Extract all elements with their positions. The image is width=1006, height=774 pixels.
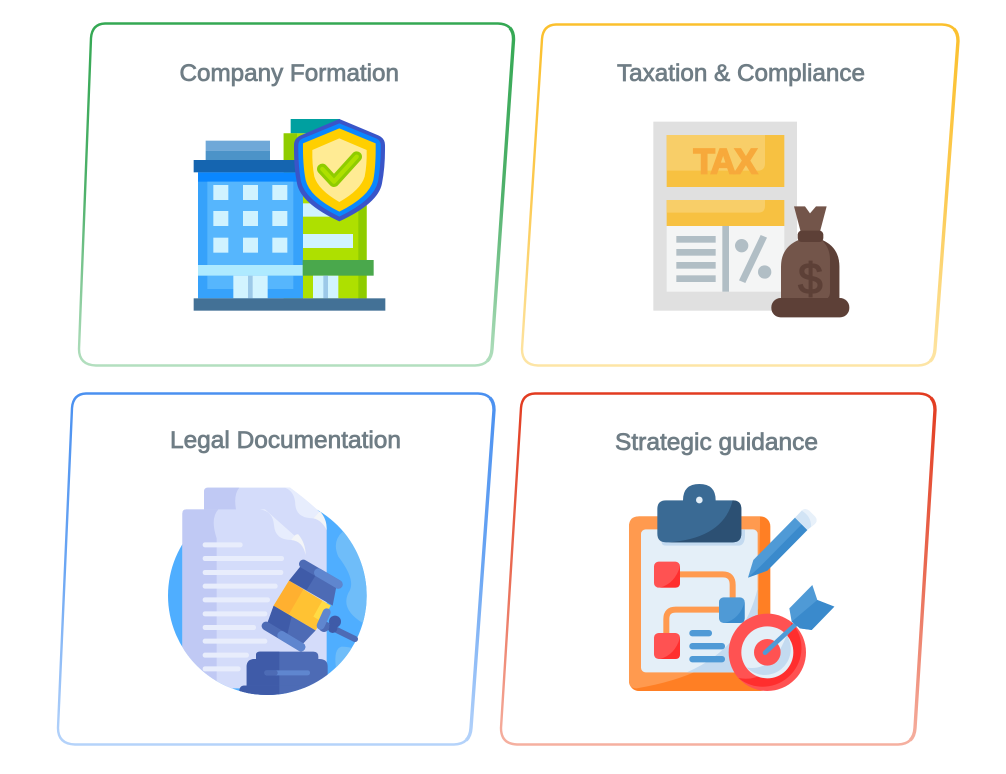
icon: tax document with money bag: TAX xyxy=(693,142,758,181)
panel: Legal Documentation xyxy=(58,394,494,744)
panel: Strategic guidance xyxy=(501,394,935,744)
icon: tax document with money bag xyxy=(653,122,849,317)
heading: Legal Documentation xyxy=(170,427,401,454)
icon: tax document with money bag: $ xyxy=(798,254,823,303)
icon: target with arrow xyxy=(729,585,834,691)
card border red xyxy=(501,394,935,744)
panel: Taxation & Compliance xyxy=(522,24,958,366)
card border yellow xyxy=(522,24,958,366)
icon: clipboard with plan, pencil and target xyxy=(629,484,834,691)
icon: documents and gavel xyxy=(168,488,373,699)
card border blue xyxy=(58,394,494,744)
card border green xyxy=(79,24,514,366)
heading: Strategic guidance xyxy=(615,429,818,456)
heading: Company Formation xyxy=(180,60,399,87)
icon: office buildings with shield xyxy=(194,119,385,311)
panel: Company Formation xyxy=(79,24,514,366)
heading: Taxation & Compliance xyxy=(617,60,865,87)
